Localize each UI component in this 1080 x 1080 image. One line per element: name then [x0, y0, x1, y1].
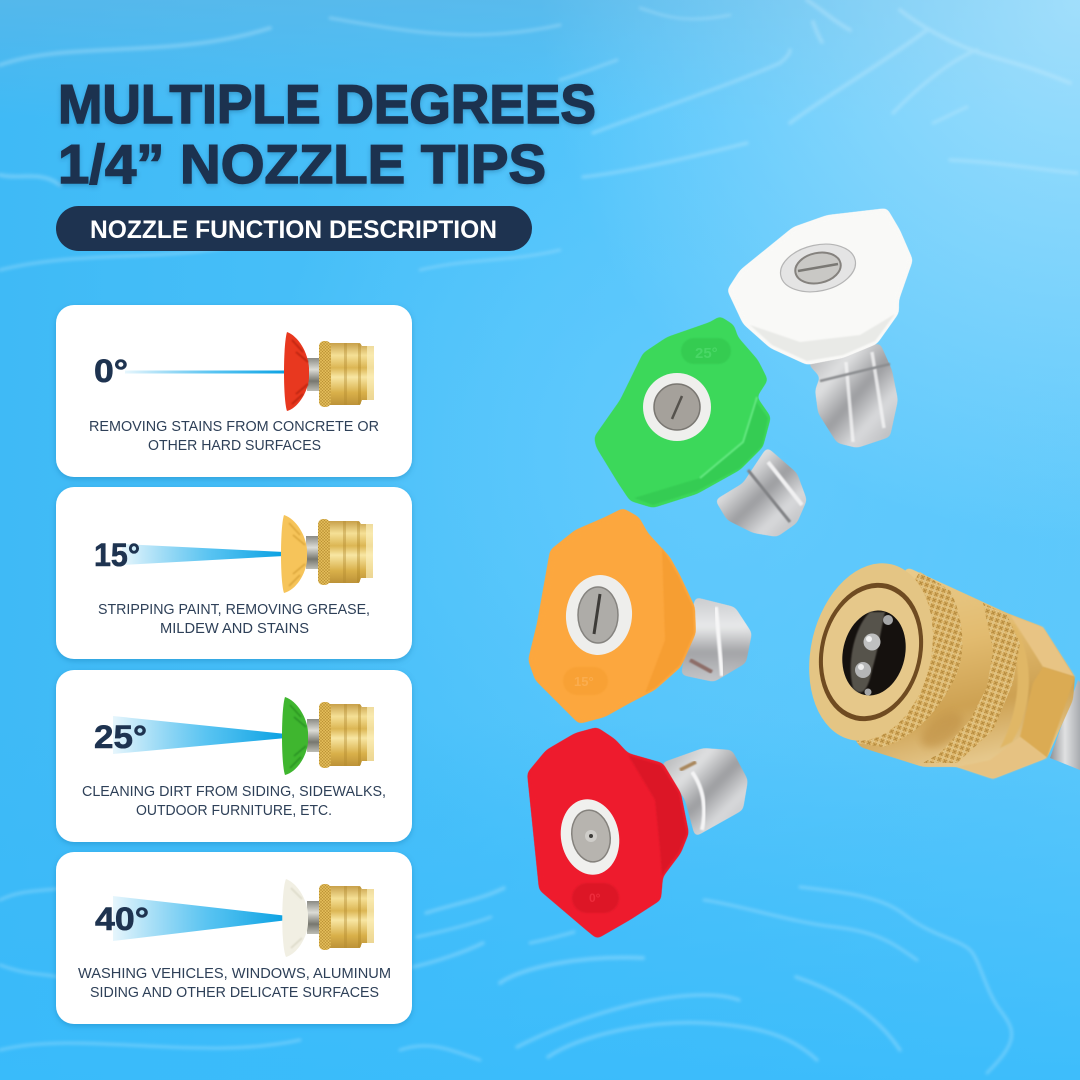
description 40 degrees	[78, 966, 391, 1001]
degree label 25: 25°	[94, 719, 147, 755]
small nozzle: red	[284, 332, 374, 411]
large green nozzle: 25°	[695, 345, 718, 362]
description 25 degrees: CLEANING DIRT FROM SIDING, SIDEWALKS,	[82, 784, 386, 800]
description 25 degrees	[82, 784, 386, 819]
description 0 degrees: REMOVING STAINS FROM CONCRETE OR	[89, 419, 379, 435]
small nozzle: yellow	[281, 515, 373, 593]
spray beam 15 degrees	[122, 544, 284, 565]
large red nozzle: 0°	[589, 891, 601, 905]
spray beam 40 degrees	[113, 896, 288, 941]
degree label 15: 15°	[94, 537, 140, 573]
degree label 40: 40°	[95, 901, 149, 937]
description 40 degrees: WASHING VEHICLES, WINDOWS, ALUMINUM	[78, 966, 391, 982]
small nozzle: white	[282, 879, 374, 957]
title	[58, 73, 596, 195]
subtitle pill: NOZZLE FUNCTION DESCRIPTION	[90, 216, 497, 244]
small nozzle: green	[282, 697, 374, 775]
description 0 degrees: OTHER HARD SURFACES	[148, 438, 321, 454]
description 15 degrees: MILDEW AND STAINS	[160, 621, 309, 637]
degree label 0: 0°	[94, 353, 128, 389]
panel: 40 degree nozzle	[56, 852, 412, 1024]
large red nozzle	[527, 727, 748, 939]
description 40 degrees: SIDING AND OTHER DELICATE SURFACES	[90, 985, 379, 1001]
large orange nozzle	[528, 508, 752, 724]
description 15 degrees: STRIPPING PAINT, REMOVING GREASE,	[98, 602, 370, 618]
title: 1/4” NOZZLE TIPS	[58, 133, 546, 195]
description 25 degrees: OUTDOOR FURNITURE, ETC.	[136, 803, 332, 819]
title: MULTIPLE DEGREES	[58, 73, 596, 135]
description 0 degrees	[89, 419, 379, 454]
panel: 15 degree nozzle	[56, 487, 412, 659]
panel: 0 degree nozzle	[56, 305, 412, 477]
spray beam 0 degrees	[125, 370, 288, 374]
description 15 degrees	[98, 602, 370, 637]
large green nozzle	[594, 316, 807, 537]
spray beam 25 degrees	[113, 716, 286, 754]
panel: 25 degree nozzle	[56, 670, 412, 842]
large white nozzle	[727, 208, 913, 448]
large brass quick connector	[792, 551, 1080, 779]
subtitle pill	[56, 206, 532, 251]
large orange nozzle: 15°	[574, 674, 594, 689]
